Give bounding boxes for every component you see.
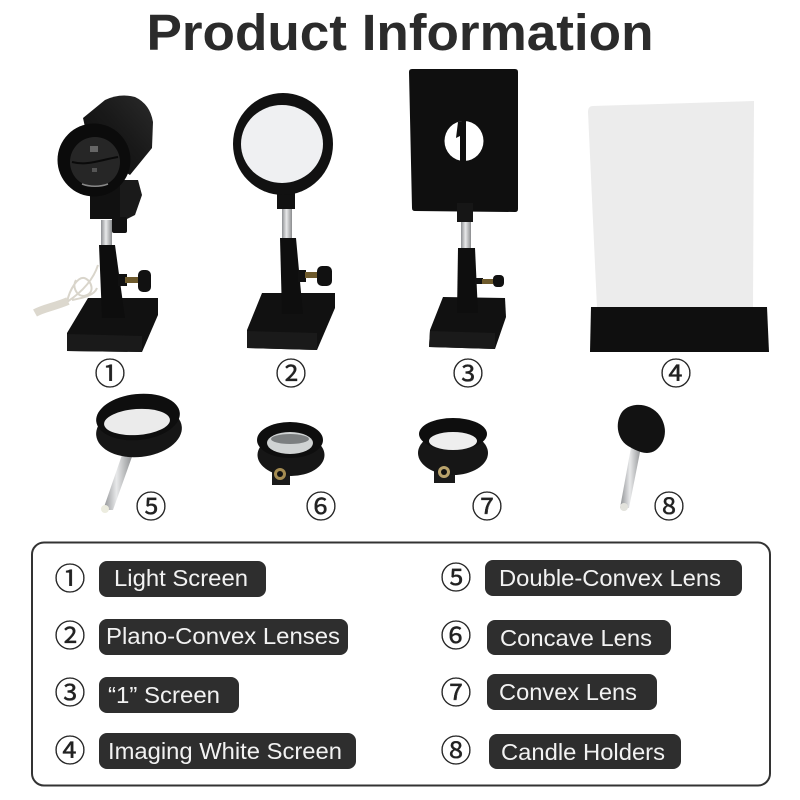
legend row 3: ③: [54, 668, 86, 713]
number 6 label: ⑥: [306, 482, 336, 527]
legend row 1: ①: [54, 554, 86, 599]
legend row 8: ⑧: [440, 726, 472, 771]
legend row 3: [54, 668, 239, 713]
legend row 3: “1” Screen: [108, 682, 220, 708]
item 8: candle holder: [618, 405, 665, 511]
item 5: double-convex lens: [94, 390, 184, 513]
number 2 label: ②: [276, 349, 306, 394]
legend row 6: ⑥: [440, 611, 472, 656]
item 1: light screen: [35, 96, 158, 352]
number 5 label: ⑤: [136, 482, 166, 527]
legend row 5: Double-Convex Lens: [499, 565, 721, 591]
title: Product Information: [146, 4, 654, 61]
legend row 1: [54, 554, 266, 599]
number 8 label: ⑧: [654, 482, 684, 527]
number 7 label: ⑦: [472, 482, 502, 527]
legend row 2: ②: [54, 611, 86, 656]
legend row 7: Convex Lens: [499, 679, 637, 705]
legend row 2: [54, 611, 348, 656]
number 1 label: ①: [94, 349, 126, 394]
number 4 label: ④: [660, 349, 692, 394]
legend row 2: Plano-Convex Lenses: [106, 623, 340, 649]
item 6: concave lens: [257, 422, 324, 485]
legend row 7: ⑦: [440, 668, 472, 713]
item 3: "1" screen: [409, 69, 518, 349]
item 4: imaging white screen: [588, 101, 769, 352]
legend row 4: [54, 726, 356, 771]
legend row 6: Concave Lens: [500, 625, 652, 651]
panel: parts legend: [32, 542, 770, 786]
legend row 5: ⑤: [440, 553, 472, 598]
legend row 8: Candle Holders: [501, 739, 665, 765]
legend row 7: [440, 668, 657, 713]
legend row 4: Imaging White Screen: [108, 738, 342, 764]
legend row 6: [440, 611, 671, 656]
legend row 8: [440, 726, 681, 771]
legend row 1: Light Screen: [114, 565, 248, 591]
item 2: plano-convex lens: [233, 93, 335, 350]
legend row 5: [440, 553, 742, 598]
item 7: convex lens: [418, 418, 488, 483]
legend row 4: ④: [54, 726, 86, 771]
number 3 label: ③: [452, 349, 484, 394]
